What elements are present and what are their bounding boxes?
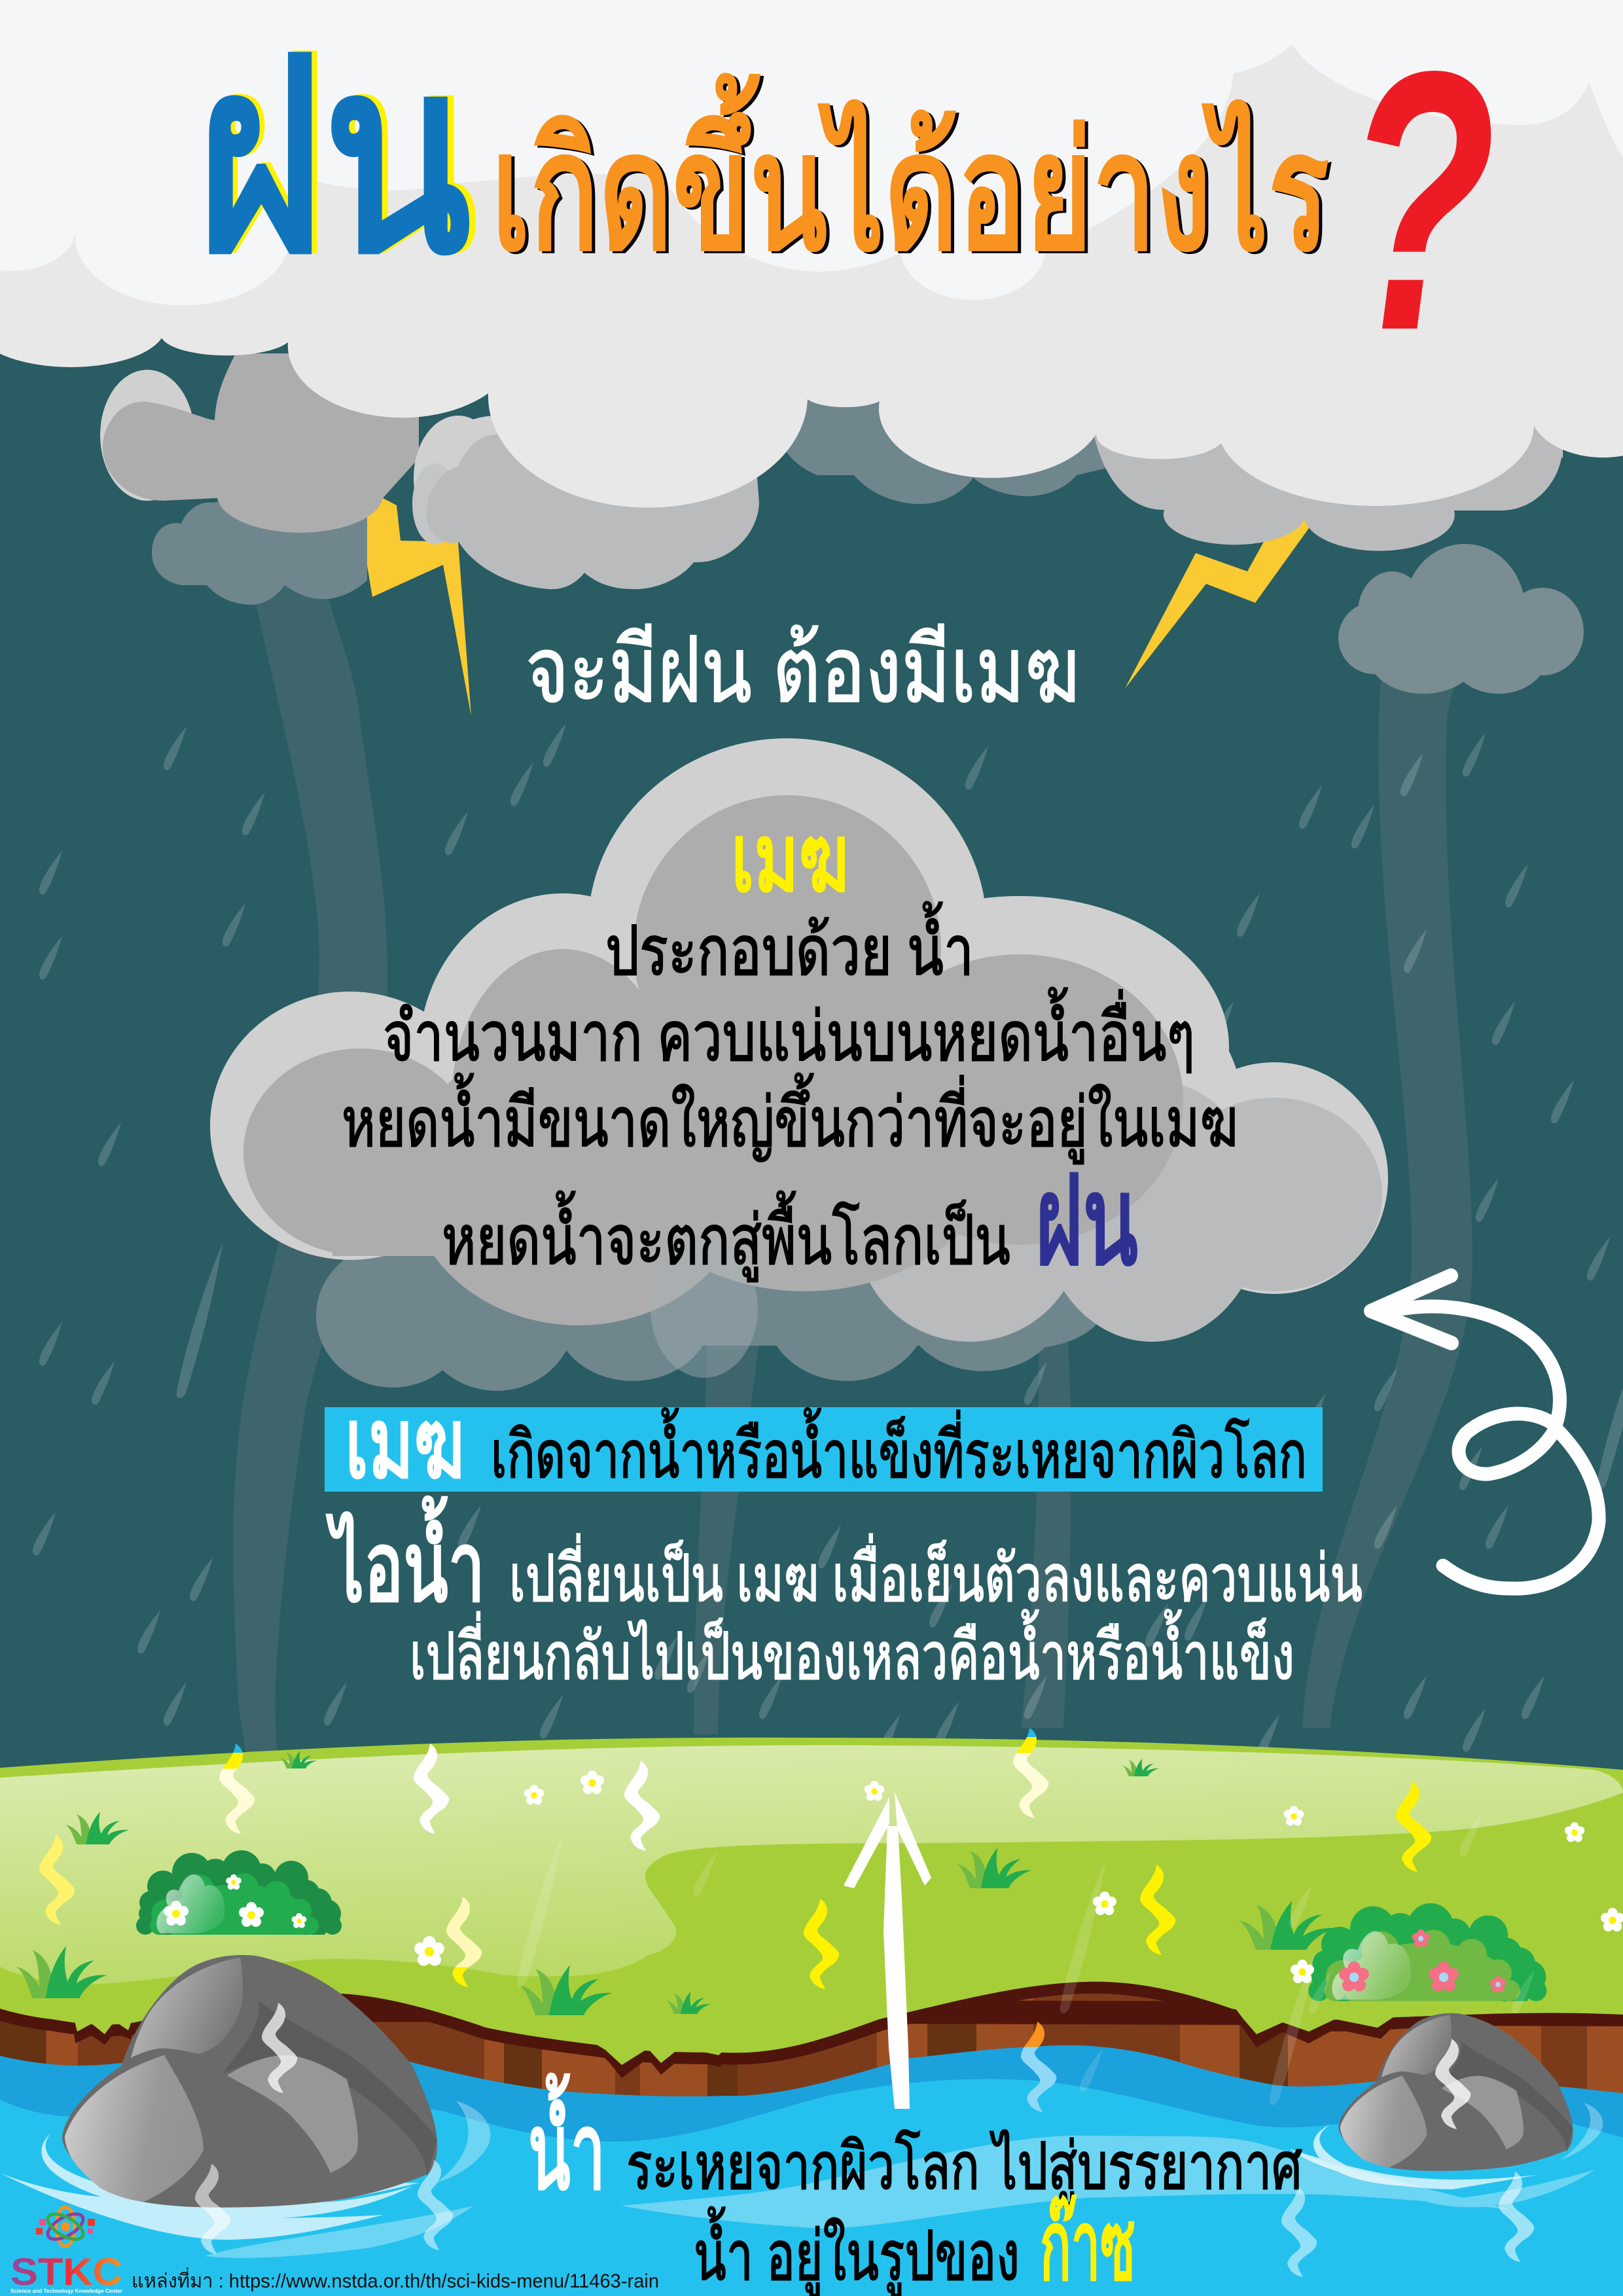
back cloud: centre — [776, 367, 1107, 504]
grass edge fringes — [72, 2009, 1400, 2078]
bush left — [136, 1850, 342, 1935]
tornado funnels — [233, 514, 1486, 2127]
logo: STKC: Science and Technology Knowledge Center — [10, 2288, 122, 2294]
back cloud under main cloud — [316, 1237, 1106, 1391]
rock large — [62, 1955, 437, 2208]
back cloud: right small — [1338, 544, 1584, 694]
logo: STKC — [10, 2207, 122, 2294]
text: water vapour: เปลี่ยนกลับไปเป็นของเหลวคือน้ำหรือน้ำแข็ง — [410, 1609, 1294, 1693]
top cloud front layer — [0, 0, 1623, 306]
pink flowers — [1339, 1929, 1506, 1992]
lightning right — [1125, 514, 1312, 689]
white flowers — [414, 1770, 1623, 1983]
cloud lobe overlap — [651, 1240, 758, 1378]
rock small — [1338, 2013, 1573, 2171]
water — [0, 2029, 1623, 2296]
text: water evaporates: น้ำ อยู่ในรูปของ — [694, 2206, 1020, 2296]
cloud text: ประกอบด้วย น้ำ — [605, 901, 974, 990]
grass tufts — [16, 1751, 1336, 2015]
grey cloud top right — [1090, 367, 1563, 551]
cloud text: เมฆ — [731, 805, 849, 911]
title: ฝน — [196, 7, 472, 307]
title — [196, 6, 1332, 307]
text: water evaporates: ระเหยจากผิวโลก ไปสู่บรรยากาศ — [626, 2130, 1302, 2206]
bar: cloud origin: เมฆ — [345, 1388, 465, 1498]
curved arrow — [1371, 1276, 1599, 1588]
water ripples — [0, 2124, 1537, 2240]
lightning left — [359, 498, 471, 716]
grey cloud top left — [100, 353, 419, 533]
cloud text: หยดน้ำจะตกสู่พื้นโลกเป็น — [442, 1191, 1010, 1282]
evaporation wiggles — [39, 1728, 1534, 2277]
text: water vapour — [325, 1495, 1363, 1693]
subheading: จะมีฝน ต้องมีเมฆ — [526, 619, 1080, 721]
bar: cloud origin: เกิดจากน้ำหรือน้ำแข็งที่ระเหยจากผิวโลก — [491, 1408, 1307, 1492]
long rain streaks on field — [517, 1813, 1535, 2105]
cloud text: จำนวนมาก ควบแน่นบนหยดน้ำอื่นๆ — [383, 987, 1195, 1075]
text: water evaporates — [528, 2072, 1302, 2296]
up arrow — [844, 1792, 931, 2109]
cloud text: ฝน — [1035, 1152, 1138, 1291]
grass field — [0, 1738, 1623, 2065]
top cloud back layer — [0, 0, 1623, 508]
grey cloud top middle — [412, 406, 759, 589]
back cloud: small left — [152, 484, 367, 605]
river bank — [0, 1994, 1623, 2096]
light patch on field — [0, 1745, 1623, 1984]
cloud text — [342, 805, 1238, 1291]
bar: cloud origin — [325, 1388, 1323, 1498]
bush right — [1308, 1903, 1547, 2001]
title: ฝน — [201, 6, 478, 306]
text: water evaporates: น้ำ — [528, 2072, 605, 2212]
cloud text: หยดน้ำมีขนาดใหญ่ขึ้นกว่าที่จะอยู่ในเมฆ — [342, 1073, 1238, 1164]
question mark: ? — [1345, 0, 1496, 407]
logo: STKC: STKC — [10, 2251, 122, 2293]
text: water vapour: ไอน้ำ — [325, 1495, 485, 1622]
source text: แหล่งที่มา : https://www.nstda.or.th/th/sci-kids-menu/11463-rain — [132, 2267, 659, 2292]
rain drops — [33, 723, 1623, 1759]
panel: main cloud — [210, 738, 1388, 1378]
